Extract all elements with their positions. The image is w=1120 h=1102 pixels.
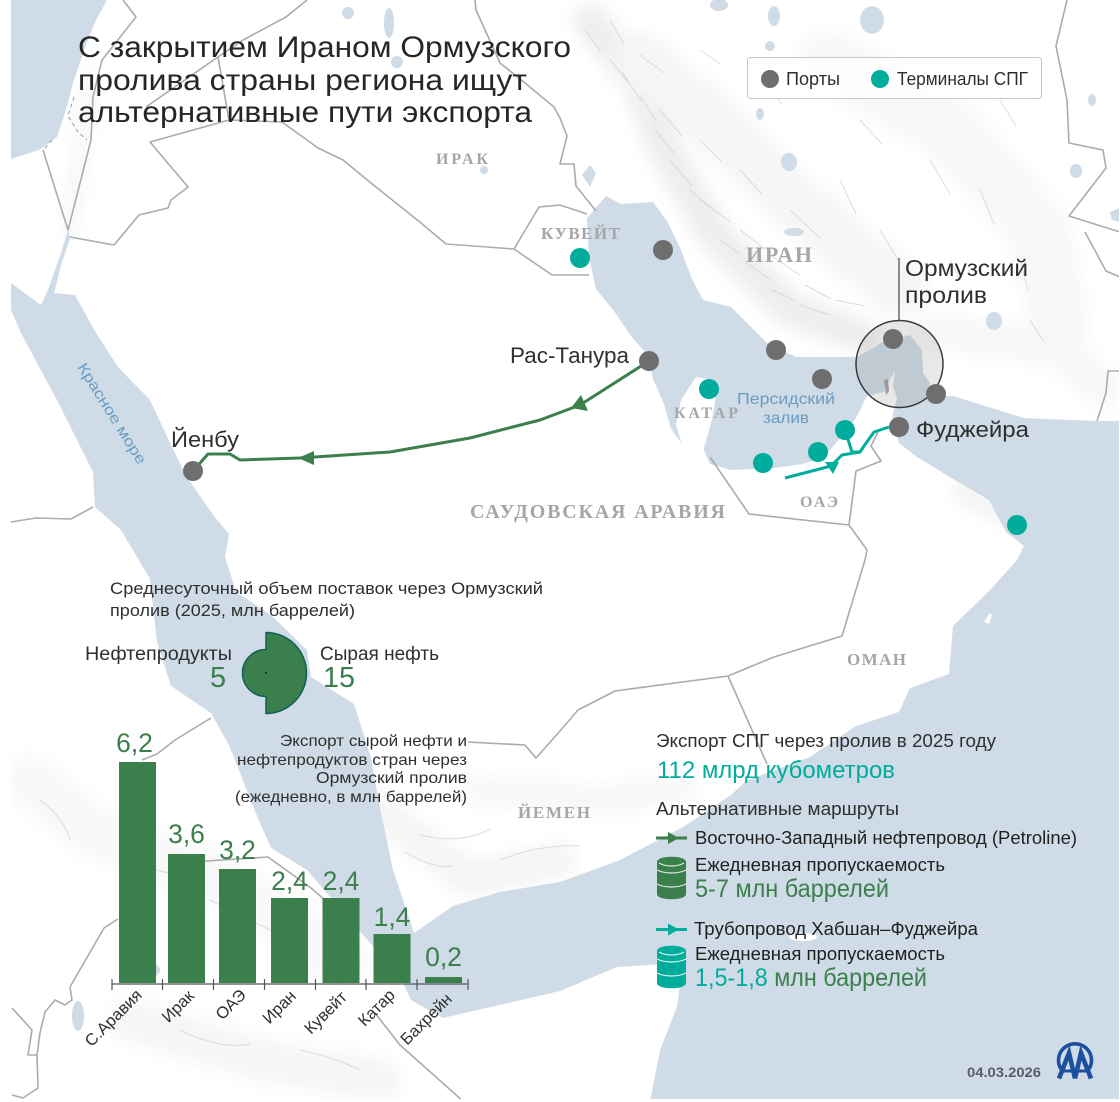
country labels: ИРАК	[436, 151, 488, 168]
daily Hormuz flow heading	[110, 579, 543, 620]
country labels: ОАЭ	[800, 494, 838, 511]
date: 04.03.2026	[967, 1064, 1041, 1080]
route: Habshan-Fujairah: Ежедневная пропускаемость	[695, 944, 945, 964]
category labels	[82, 986, 456, 1050]
route: Petroline: 5-7 млн баррелей	[695, 875, 889, 903]
pipeline: Habshan-Fujairah	[785, 427, 889, 478]
category labels: Ирак	[159, 987, 198, 1026]
country labels: КАТАР	[674, 405, 738, 422]
bar chart heading	[235, 733, 467, 806]
bar chart heading: нефтепродуктов стран через	[237, 752, 467, 769]
arrow on Petroline east	[571, 395, 588, 411]
value labels: 0,2	[425, 942, 462, 972]
logo: Anadolu Agency	[1058, 1044, 1092, 1078]
country labels: САУДОВСКАЯ АРАВИЯ	[470, 501, 726, 523]
place labels: Фуджейра	[916, 417, 1030, 442]
LNG export block	[656, 731, 996, 784]
label: crude oil: 15	[323, 662, 355, 694]
legend: LNG terminals: Терминалы СПГ	[897, 69, 1028, 89]
country labels: ИРАН	[746, 242, 812, 267]
port markers	[183, 240, 946, 481]
sea labels: залив	[763, 410, 809, 427]
LNG terminal markers	[570, 248, 1027, 535]
legend: ports: Порты	[786, 69, 840, 89]
place labels: Йенбу	[171, 427, 239, 452]
category labels: Иран	[259, 987, 300, 1028]
category labels: С.Аравия	[82, 986, 146, 1050]
category labels: Катар	[355, 986, 399, 1030]
sea: Mediterranean	[11, 0, 107, 159]
sea labels: Персидский	[737, 391, 835, 408]
value labels: 3,6	[168, 819, 205, 849]
value labels: 6,2	[116, 728, 153, 758]
daily Hormuz flow heading: Среднесуточный объем поставок через Ормузский	[110, 579, 543, 598]
arrow on Petroline west	[298, 451, 314, 465]
label: oil products	[85, 644, 232, 694]
legend: ports	[761, 69, 840, 89]
icon: teal barrel	[657, 946, 686, 988]
route: Habshan-Fujairah: Трубопровод Хабшан–Фуджейра	[694, 919, 979, 939]
category labels: ОАЭ	[212, 986, 250, 1024]
icon: green barrel	[657, 857, 686, 899]
route: Petroline: Восточно-Западный нефтепровод (Petroline)	[695, 828, 1077, 848]
title: С закрытием Ираном Ормузского	[78, 31, 571, 64]
value labels: 1,4	[374, 902, 410, 932]
value labels: 2,4	[271, 866, 308, 896]
title: альтернативные пути экспорта	[78, 96, 532, 129]
Strait of Hormuz callout	[856, 255, 1028, 408]
sea: Red Sea, Gulf of Aden and Arabian Sea	[11, 230, 1120, 1102]
bar chart heading: Экспорт сырой нефти и	[280, 733, 467, 750]
label: oil products: Нефтепродукты	[85, 644, 232, 665]
axis	[112, 979, 468, 990]
legend	[748, 58, 1042, 98]
bar chart	[82, 728, 468, 1050]
alternative routes heading: Альтернативные маршруты	[656, 799, 899, 819]
polar pie chart	[85, 632, 439, 714]
route: Petroline: Ежедневная пропускаемость	[695, 855, 945, 875]
label: crude oil: Сырая нефть	[320, 644, 439, 665]
value labels	[116, 728, 462, 972]
route: Habshan-Fujairah	[656, 919, 979, 992]
country labels: КУВЕЙТ	[541, 224, 621, 243]
label: crude oil	[320, 644, 439, 694]
value labels: 2,4	[323, 866, 359, 896]
Strait of Hormuz callout: пролив	[905, 282, 987, 308]
place labels	[171, 343, 1030, 452]
label: oil products: 5	[210, 662, 226, 694]
country labels: ЙЕМЕН	[518, 803, 590, 822]
daily Hormuz flow heading: пролив (2025, млн баррелей)	[110, 601, 355, 620]
Strait of Hormuz callout: Ормузский	[905, 255, 1028, 281]
country labels: ОМАН	[847, 650, 906, 669]
sea labels: Красное море	[74, 360, 149, 467]
icon: teal arrow	[656, 924, 687, 936]
islands	[789, 613, 992, 941]
title: пролива страны региона ищут	[78, 64, 527, 97]
land: Musandam peninsula	[867, 371, 897, 413]
LNG export block: Экспорт СПГ через пролив в 2025 году	[656, 731, 996, 751]
bar chart heading: Ормузский пролив	[316, 770, 467, 787]
sea: Persian Gulf	[587, 196, 930, 470]
arrow on Habshan-Fujairah	[825, 462, 839, 474]
route: Habshan-Fujairah: 1,5-1,8 млн баррелей	[695, 964, 927, 992]
bar chart heading: (ежедневно, в млн баррелей)	[235, 789, 467, 806]
country labels	[436, 151, 906, 822]
place labels: Рас-Танура	[510, 343, 630, 368]
sea labels	[74, 360, 835, 467]
LNG export block: 112 млрд кубометров	[657, 757, 895, 784]
category labels: Бахрейн	[397, 990, 456, 1049]
icon: green arrow	[656, 832, 687, 844]
value labels: 3,2	[219, 835, 256, 865]
land: Qatar	[676, 377, 716, 450]
pipeline: Petroline	[193, 361, 649, 471]
category labels: Кувейт	[301, 988, 351, 1038]
title	[78, 31, 571, 129]
route: Petroline	[656, 828, 1077, 903]
bars	[119, 762, 462, 983]
